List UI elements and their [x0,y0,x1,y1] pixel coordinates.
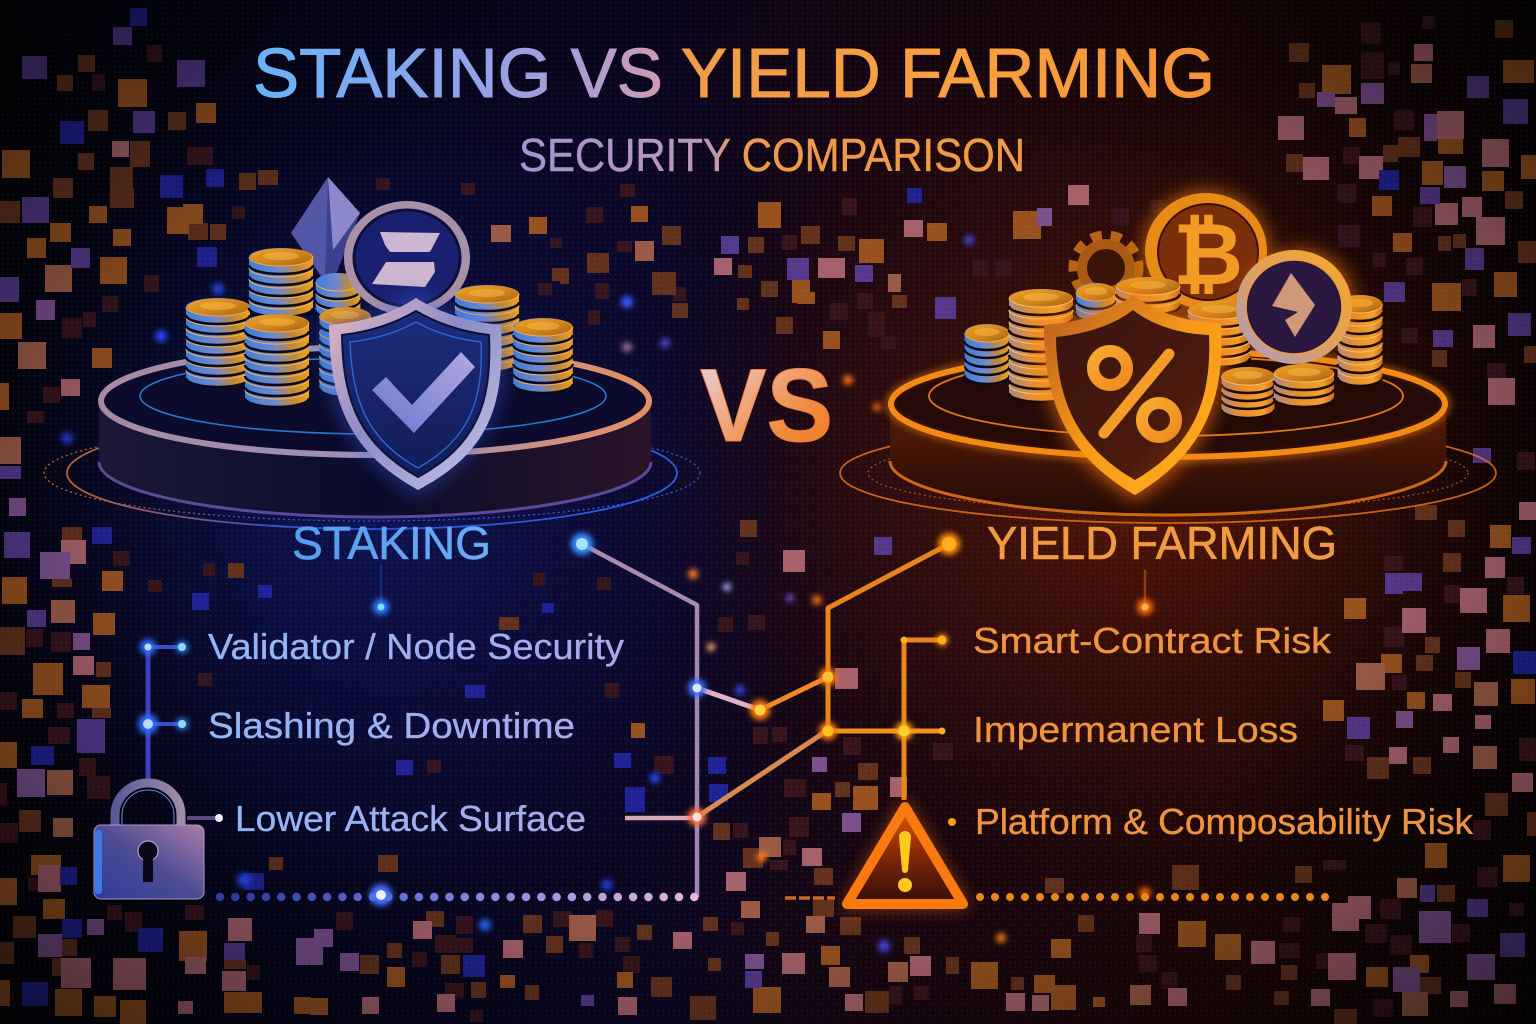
list: yield farming risks [973,620,1474,842]
icon: staking round coin [344,201,470,315]
item: impermanent loss: Impermanent Loss [973,709,1298,750]
right outer orbit rings [840,423,1496,523]
heading: yield farming: YIELD FARMING [987,517,1337,569]
icon: staking coin stacks [186,248,573,407]
VS label: VS [700,348,833,464]
circuit lines: connecting staking and yield [148,544,1330,898]
circuit nodes [143,537,1148,900]
icon: gear [1073,235,1139,301]
icon: warning triangle [841,797,971,909]
icon: staking shield with check mark [322,290,508,497]
icon: bitcoin coin: ₿ [1173,207,1243,303]
icon: padlock [94,783,204,899]
item: platform and composability risk: Platform & Composability Risk [975,801,1474,842]
icon: yield coin stacks in front [965,289,1334,418]
item: slashing and downtime: Slashing & Downtime [208,705,575,746]
item: smart-contract risk: Smart-Contract Risk [973,620,1332,661]
title: STAKING VS YIELD FARMING [253,34,1215,112]
subtitle: SECURITY COMPARISON [519,129,1025,181]
left podium [99,347,651,517]
icon: staking diamond token [291,177,360,290]
left outer orbit rings [44,417,700,529]
heading: staking: STAKING [292,517,491,569]
soft glow particles [61,235,1151,952]
icon: yield shield with percent sign [1038,286,1227,502]
circuit node glows [138,533,1153,906]
icon: yield coin stacks behind shield [1076,277,1382,386]
icon: bitcoin coin [1142,189,1270,313]
item: lower attack surface: Lower Attack Surface [235,798,586,839]
right podium [888,348,1448,515]
icon: ethereum coin [1236,248,1355,364]
list: staking security points [208,626,624,839]
item: validator / node security: Validator / Node Security [208,626,624,667]
